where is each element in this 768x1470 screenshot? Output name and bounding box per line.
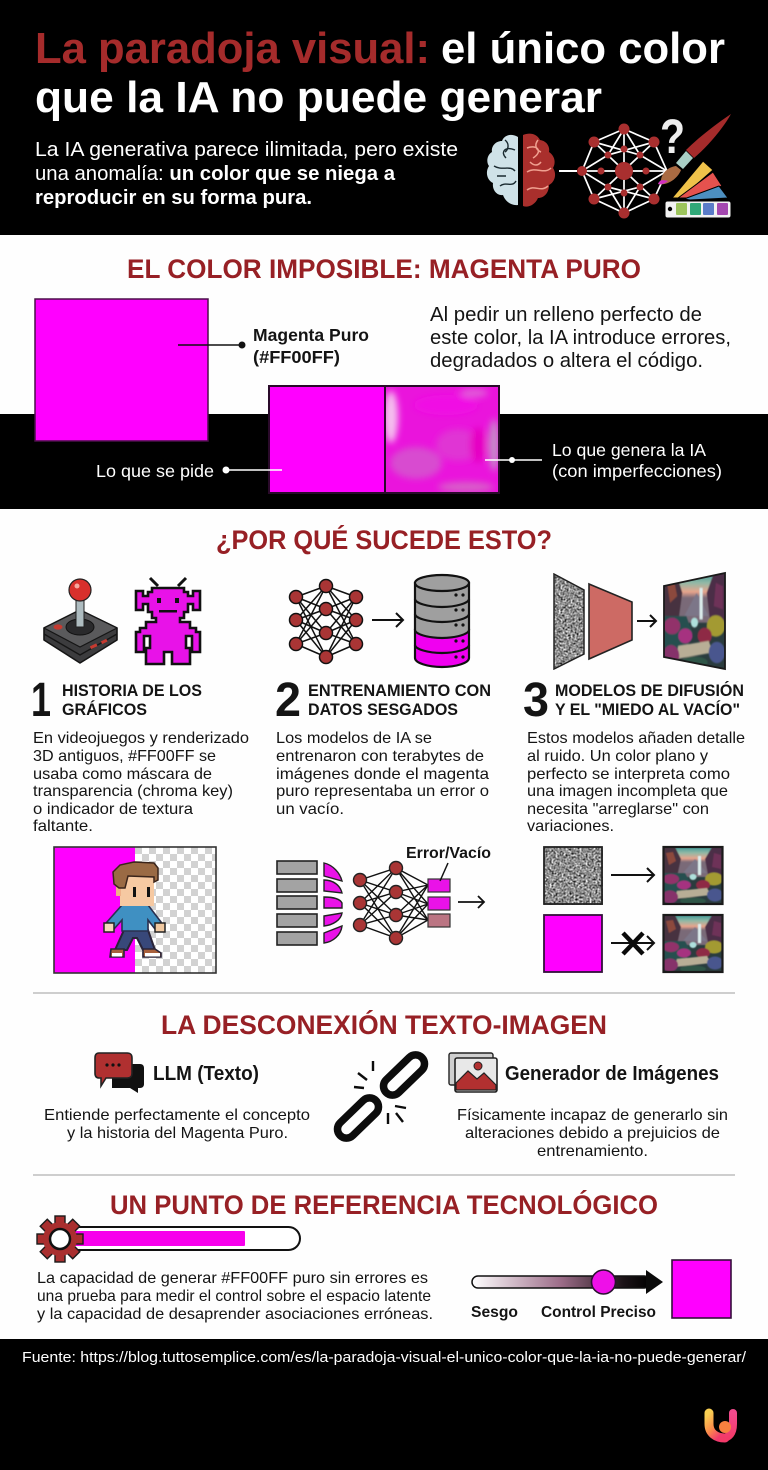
- label: generated: Lo que genera la IA: [552, 440, 706, 460]
- magenta result square: [672, 1260, 731, 1318]
- icon: chat bubbles: [95, 1053, 144, 1093]
- column 2: biased data: puro representaba un error o: [276, 783, 489, 800]
- column 1: graphics history: faltante.: [33, 818, 93, 835]
- column 1: graphics history: transparencia (chroma key): [33, 783, 233, 800]
- panel: technology benchmark: [37, 1189, 731, 1323]
- panel: why it happens: [31, 524, 745, 973]
- column 2: biased data: entrenaron con terabytes de: [276, 748, 484, 765]
- intro text: una anomalía: un color que se niega a: [35, 163, 396, 185]
- icon: question mark: ?: [660, 111, 685, 164]
- column 3: diffusion models: una imagen incompleta que: [527, 783, 728, 800]
- explanation text: degradados o altera el código.: [430, 350, 703, 372]
- slider bias to control: [471, 1270, 663, 1321]
- icon: gear: [37, 1216, 83, 1262]
- icon: logo: [709, 1413, 733, 1438]
- column 2: biased data: ENTRENAMIENTO CON: [308, 682, 491, 700]
- icon: brain: [487, 134, 555, 207]
- column 2: biased data: 2: [275, 674, 301, 727]
- slider bias to control: Control Preciso: [541, 1304, 656, 1321]
- label: generated: (con imperfecciones): [552, 461, 722, 481]
- column 3: diffusion models: al ruido. Un color plano y: [527, 748, 708, 765]
- panel: header: [0, 0, 768, 235]
- column 3: diffusion models: Estos modelos añaden detalle: [527, 730, 745, 747]
- column 2: biased data: [275, 674, 491, 818]
- connector line: [559, 170, 577, 172]
- title: el único color: [441, 24, 725, 73]
- title: que la IA no puede generar: [35, 73, 602, 122]
- heading: UN PUNTO DE REFERENCIA TECNOLÓGICO: [110, 1189, 658, 1220]
- image generator block: alteraciones debido a prejuicios de: [465, 1125, 720, 1142]
- column 2: biased data: Los modelos de IA se: [276, 730, 432, 747]
- column 1: graphics history: 3D antiguos, #FF00FF se: [33, 748, 216, 765]
- column 1: graphics history: En videojuegos y renderizado: [33, 730, 249, 747]
- icon: colour swatch fan: [665, 161, 731, 218]
- column 3: diffusion models: MODELOS DE DIFUSIÓN: [555, 681, 744, 700]
- LLM block: [44, 1063, 310, 1142]
- illustration: biased network: [277, 845, 491, 945]
- icon: paintbrush: [658, 114, 731, 184]
- column 3: diffusion models: perfecto se interpreta como: [527, 766, 730, 783]
- icon: pixel robot: [136, 578, 200, 664]
- benchmark text: [37, 1270, 433, 1323]
- benchmark text: y la capacidad de desaprender asociaciones erróneas.: [37, 1306, 433, 1323]
- swatch callout: [178, 325, 369, 367]
- intro text: La IA generativa parece ilimitada, pero existe: [35, 139, 458, 161]
- explanation text: este color, la IA introduce errores,: [430, 327, 731, 349]
- swatch callout: Magenta Puro: [253, 325, 369, 345]
- column 1: graphics history: o indicador de textura: [33, 801, 193, 818]
- panel: impossible color: [0, 254, 768, 509]
- AI generated magenta: [384, 387, 499, 492]
- comparison frame: [268, 385, 500, 494]
- column 3: diffusion models: variaciones.: [527, 818, 614, 835]
- column 1: graphics history: 1: [31, 674, 51, 727]
- icon: database: [415, 575, 469, 667]
- column 1: graphics history: usaba como máscara de: [33, 766, 212, 783]
- panel: text-image disconnect: [44, 1009, 728, 1160]
- heading: EL COLOR IMPOSIBLE: MAGENTA PURO: [127, 254, 641, 284]
- requested pure magenta: [270, 387, 384, 492]
- progress bar: [60, 1227, 300, 1250]
- LLM block: Entiende perfectamente el concepto: [44, 1107, 310, 1124]
- illustration: noise vs flat color: [544, 847, 723, 973]
- heading: LA DESCONEXIÓN TEXTO-IMAGEN: [161, 1009, 607, 1040]
- label: requested: Lo que se pide: [96, 461, 214, 481]
- magenta swatch: [35, 299, 208, 441]
- column 2: biased data: DATOS SESGADOS: [308, 701, 458, 719]
- column 1: graphics history: [31, 674, 249, 835]
- source text: Fuente: https://blog.tuttosemplice.com/es/la-paradoja-visual-el-unico-color-que-la-ia-no-puede-generar/: [22, 1349, 747, 1366]
- image generator block: [457, 1063, 728, 1160]
- illustration: sprite with chroma key: [54, 847, 216, 973]
- title: La paradoja visual:: [35, 24, 430, 73]
- column 3: diffusion models: necesita "arreglarse" con: [527, 801, 709, 818]
- LLM block: y la historia del Magenta Puro.: [67, 1125, 288, 1142]
- label: generated: [485, 440, 722, 481]
- label: requested: [96, 461, 282, 481]
- LLM block: LLM (Texto): [153, 1063, 259, 1085]
- intro text: [35, 139, 458, 209]
- image generator block: Físicamente incapaz de generarlo sin: [457, 1107, 728, 1124]
- benchmark text: La capacidad de generar #FF00FF puro sin errores es: [37, 1270, 428, 1287]
- column 2: biased data: un vacío.: [276, 801, 344, 818]
- column 1: graphics history: HISTORIA DE LOS: [62, 682, 202, 700]
- footer: [0, 1339, 768, 1470]
- icon: neural network: [577, 124, 667, 218]
- image generator block: Generador de Imágenes: [505, 1063, 719, 1085]
- icon: diffusion model: [553, 573, 725, 670]
- slider bias to control: Sesgo: [471, 1304, 518, 1321]
- heading: ¿POR QUÉ SUCEDE ESTO?: [216, 524, 552, 555]
- icon: neural network small: [290, 580, 362, 664]
- icon: image stack: [449, 1053, 497, 1092]
- arrow: [372, 613, 403, 627]
- column 1: graphics history: GRÁFICOS: [62, 700, 147, 719]
- title: [35, 24, 725, 122]
- column 3: diffusion models: [523, 674, 745, 835]
- column 3: diffusion models: Y EL "MIEDO AL VACÍO": [555, 700, 740, 719]
- column 3: diffusion models: 3: [523, 674, 549, 727]
- intro text: reproducir en su forma pura.: [35, 187, 312, 209]
- image generator block: entrenamiento.: [537, 1143, 648, 1160]
- icon: joystick: [44, 579, 117, 663]
- explanation text: [430, 304, 731, 372]
- column 2: biased data: imágenes donde el magenta: [276, 766, 489, 783]
- benchmark text: una prueba para medir el control sobre el espacio latente: [37, 1288, 431, 1305]
- icon: broken chain: [334, 1051, 428, 1142]
- explanation text: Al pedir un relleno perfecto de: [430, 304, 702, 326]
- swatch callout: (#FF00FF): [253, 347, 340, 367]
- illustration: biased network: Error/Vacío: [406, 845, 491, 862]
